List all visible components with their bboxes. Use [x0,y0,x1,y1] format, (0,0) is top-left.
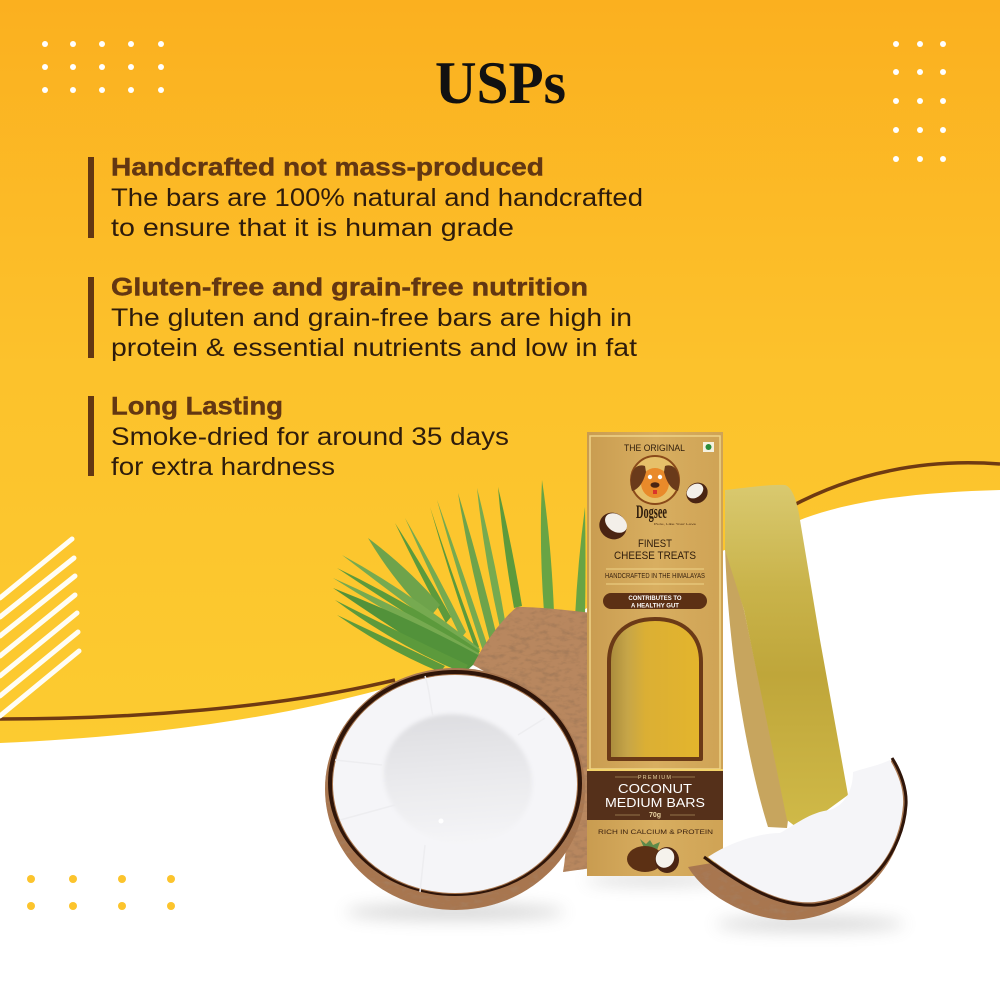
palm leaves [333,480,586,673]
brown wave line left [0,680,395,719]
usp 1 [88,154,643,242]
back coconut [473,607,592,872]
small coconut icon left [594,507,632,545]
product box: THE ORIGINAL [624,443,685,454]
product box: Dogsee [636,502,667,523]
brown band: MEDIUM BARS [605,795,705,810]
usp 1: to ensure that it is human grade [111,214,514,242]
usp 1: The bars are 100% natural and handcrafted [111,184,643,212]
window with bar [609,619,701,759]
product box: Pure, Like Your Love [654,522,697,526]
dog logo [631,456,679,504]
brown wave line right [790,463,1000,507]
dot grid top right [893,41,946,162]
dot grid bottom left [27,875,175,910]
ground shadows [345,875,905,931]
product box [587,432,723,876]
dot grid top left [42,41,164,93]
product box: FINEST [638,538,672,550]
usp 2: Gluten-free and grain-free nutrition [111,274,588,302]
cheese bar [725,485,848,830]
title: USPs [435,50,566,116]
usp 2: The gluten and grain-free bars are high in [111,304,632,332]
coconut wedge [688,758,906,920]
usp 3: Smoke-dried for around 35 days [111,423,509,451]
brown band: 70g [649,812,661,819]
product box: HANDCRAFTED IN THE HIMALAYAS [605,573,705,580]
brown band [587,769,723,820]
product box: CHEESE TREATS [614,550,696,562]
small coconut icon right [682,478,712,508]
usp 1: Handcrafted not mass-produced [111,154,544,182]
diagonal white stripes [0,539,79,716]
coconut pack icon [627,839,679,873]
product box: A HEALTHY GUT [631,604,679,610]
usp 2: protein & essential nutrients and low in fat [111,334,637,362]
coconut half [325,668,585,910]
usp 2 [88,274,637,362]
usp 3: Long Lasting [111,392,283,420]
usp 3: for extra hardness [111,453,335,481]
usp 3 [88,392,509,481]
brown band: PREMIUM [638,775,672,781]
brown band: COCONUT [618,781,692,796]
product box: CONTRIBUTES TO [628,596,682,602]
product box: RICH IN CALCIUM & PROTEIN [598,829,713,836]
